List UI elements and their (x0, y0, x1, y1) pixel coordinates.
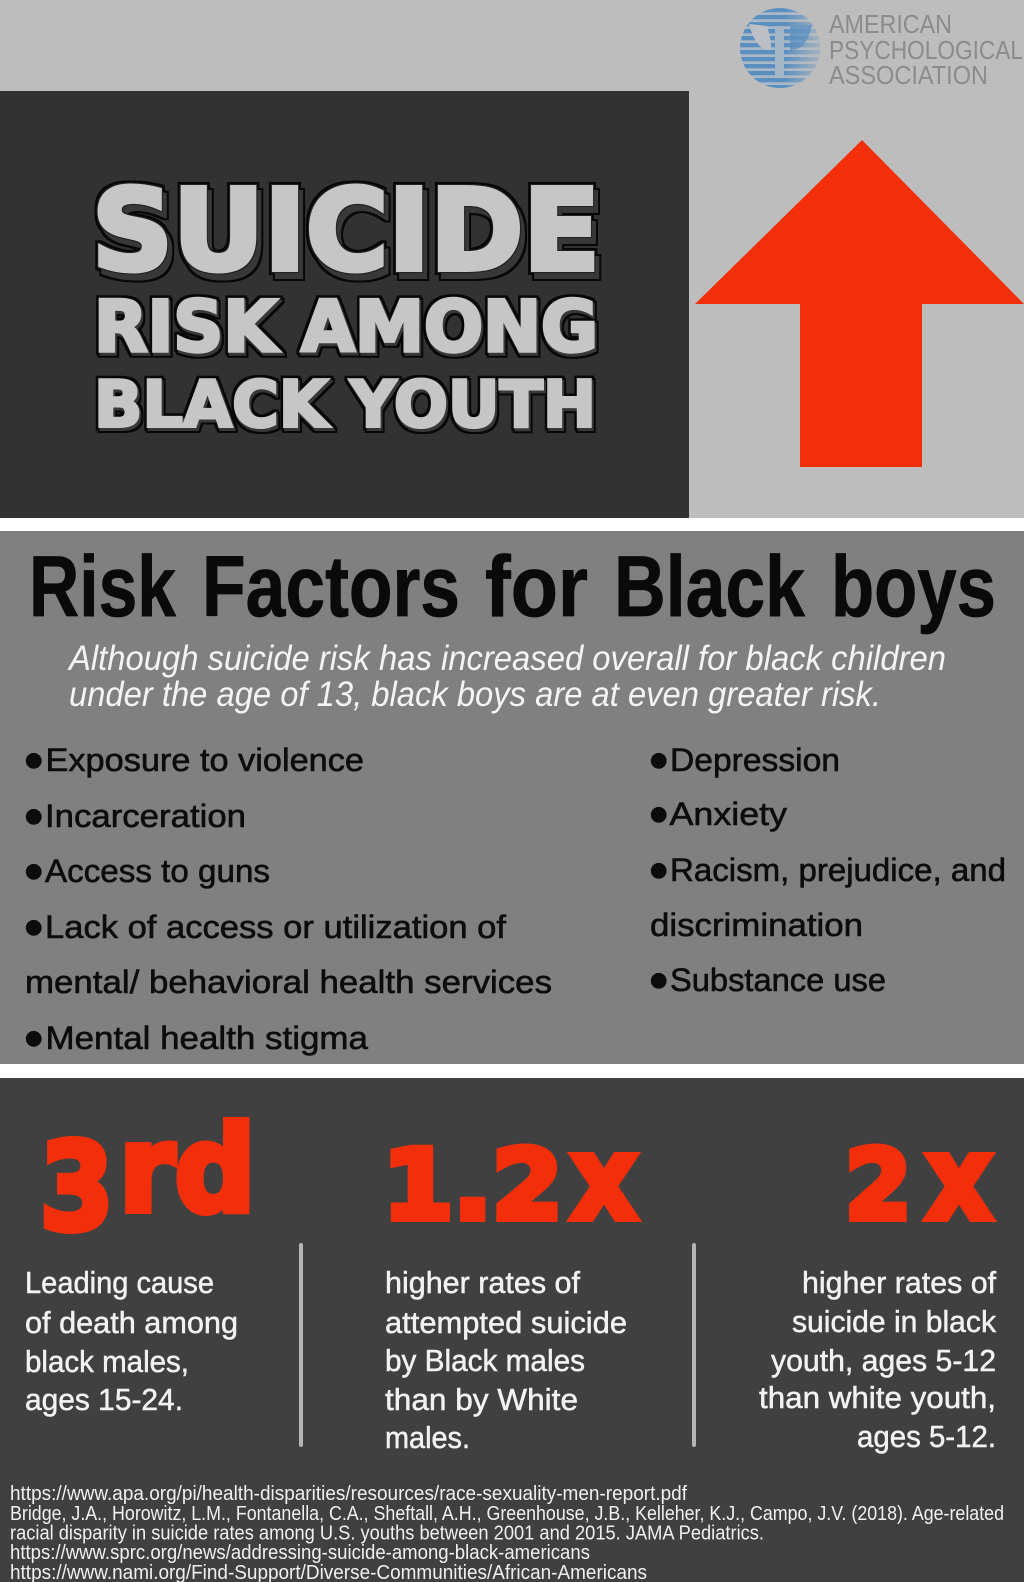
title: RISK AMONG (94, 286, 598, 368)
references (10, 1482, 1004, 1582)
title (92, 166, 600, 442)
title: SUICIDE (92, 166, 600, 296)
list: left column risk factors: ● (25, 1025, 42, 1049)
list: right column risk factors: ● (650, 857, 667, 881)
list: left column risk factors: Mental health stigma (46, 1020, 369, 1056)
stat: 2x suicide in black youth: higher rates of (802, 1265, 996, 1300)
intro text: under the age of 13, black boys are at even greater risk. (69, 675, 881, 714)
list: right column risk factors: ● (650, 967, 667, 991)
intro text (67, 639, 946, 714)
panel: header background (0, 0, 1024, 518)
icon: striped circle (740, 8, 820, 88)
panel: risk factors (0, 531, 1024, 1064)
list: left column risk factors: Lack of access or utilization of (45, 909, 507, 945)
stat: 1.2x attempted suicide: x (570, 1112, 638, 1246)
arrow: rising risk (695, 140, 1024, 467)
stat: 3rd leading cause: 3 (40, 1119, 114, 1258)
title: BLACK YOUTH (94, 368, 596, 442)
stat: 2x suicide in black youth: youth, ages 5-12 (771, 1343, 996, 1378)
list: left column risk factors: mental/ behavioral health services (25, 964, 552, 1000)
intro text: Although suicide risk has increased overall for black children (67, 639, 946, 678)
list: right column risk factors: ● (650, 747, 667, 771)
stat: 2x suicide in black youth: 2 (845, 1130, 912, 1242)
list: left column risk factors: Access to guns (45, 853, 270, 889)
list: right column risk factors: ● (650, 801, 667, 825)
logo wordmark (829, 9, 1023, 90)
references: https://www.apa.org/pi/health-disparities/resources/race-sexuality-men-report.pdf (10, 1482, 687, 1505)
list: right column risk factors: Anxiety (670, 796, 788, 832)
stat: 3rd leading cause: black males, (25, 1344, 189, 1379)
logo wordmark: AMERICAN (829, 9, 952, 39)
stat: 1.2x attempted suicide: males. (385, 1420, 470, 1455)
stat: 2x suicide in black youth: than white youth, (759, 1380, 996, 1415)
stat: 3rd leading cause (25, 1102, 256, 1417)
logo: American Psychological Association (740, 8, 1023, 90)
stat: 1.2x attempted suicide: higher rates of (385, 1265, 580, 1300)
logo wordmark: ASSOCIATION (829, 60, 988, 90)
stat: 3rd leading cause: of death among (25, 1305, 238, 1340)
list: right column risk factors: Depression (670, 742, 840, 778)
list: right column risk factors: discrimination (650, 907, 863, 943)
heading: risk factors for black boys: Factors (202, 539, 460, 635)
stat: 1.2x attempted suicide: 1.2 (383, 1130, 563, 1242)
list: right column risk factors (650, 742, 1006, 998)
stat: 1.2x attempted suicide: by Black males (385, 1343, 585, 1378)
list: left column risk factors: ● (25, 858, 42, 882)
heading: risk factors for black boys: for (485, 539, 588, 635)
heading: risk factors for black boys: Black (614, 539, 805, 635)
list: left column risk factors: ● (25, 803, 42, 827)
stat: 3rd leading cause: rd (119, 1102, 256, 1240)
list: left column risk factors (25, 742, 552, 1056)
panel: statistics (0, 1078, 1024, 1582)
references: racial disparity in suicide rates among U.S. youths between 2001 and 2015. JAMA Pediatrics. (10, 1522, 764, 1544)
list: left column risk factors: ● (25, 747, 42, 771)
references: https://www.sprc.org/news/addressing-suicide-among-black-americans (10, 1541, 590, 1564)
panel: title block (0, 91, 689, 518)
heading: risk factors for black boys: Risk (29, 539, 176, 635)
stat: 1.2x attempted suicide: attempted suicide (385, 1305, 627, 1340)
list: right column risk factors: Substance use (670, 962, 886, 998)
stat: 2x suicide in black youth (759, 1112, 996, 1454)
list: left column risk factors: ● (25, 914, 42, 938)
list: left column risk factors: Exposure to violence (46, 742, 364, 778)
stat: 2x suicide in black youth: x (926, 1112, 992, 1246)
list: left column risk factors: Incarceration (45, 798, 246, 834)
stat: 1.2x attempted suicide: than by White (385, 1382, 578, 1417)
list: right column risk factors: Racism, prejudice, and (670, 852, 1006, 888)
stat: 3rd leading cause: Leading cause (25, 1265, 214, 1300)
stat: 1.2x attempted suicide (383, 1112, 638, 1455)
stat: 2x suicide in black youth: suicide in black (792, 1304, 996, 1339)
stat: 3rd leading cause: ages 15-24. (25, 1382, 183, 1417)
stat: 2x suicide in black youth: ages 5-12. (857, 1419, 996, 1454)
